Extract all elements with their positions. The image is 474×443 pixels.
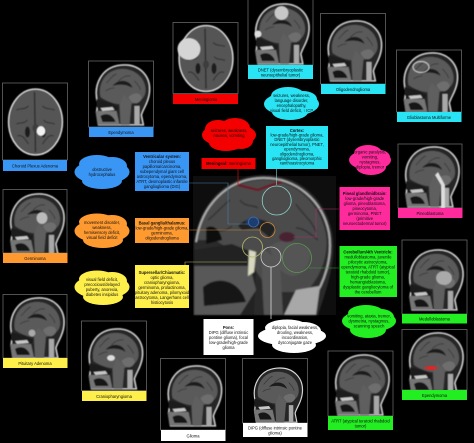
panel: DIPG xyxy=(242,358,308,437)
text box: cortex: low-grade/high-grade glioma, xyxy=(270,132,324,138)
callout: blue cloud symptoms: hydrocephalus xyxy=(89,172,115,177)
callout: white cloud symptoms: dysconjugate gaze xyxy=(278,340,313,345)
callout: green cloud symptoms: dysmetria, nystagmus, xyxy=(349,318,389,324)
text box: pineal gland/midbrain xyxy=(340,187,390,230)
callout: yellow cloud symptoms xyxy=(74,270,130,305)
callout: red cloud symptoms: nausea, vomiting xyxy=(214,133,245,138)
text box: suprasellar/chiasmatic xyxy=(135,265,190,308)
panel: pituitary adenoma xyxy=(3,294,68,368)
connector: cortex xyxy=(276,169,278,185)
callout: orange cloud symptoms: visual field deficit xyxy=(87,235,118,240)
panel: DNET: neuroepithelial tumor) xyxy=(261,72,301,78)
callout: red cloud symptoms xyxy=(202,118,256,151)
callout: cyan cloud symptoms: visual field deficit, ↑ ICP xyxy=(270,108,313,113)
text box: ventricular system: astrocytoma, ependymoma, xyxy=(137,174,187,179)
text box: suprasellar/chiasmatic: astrocytoma, Langerhans cell xyxy=(135,295,189,300)
callout: pink cloud symptoms xyxy=(349,145,391,175)
panel: glioblastoma multiforme xyxy=(396,50,462,122)
connector: basal ganglia xyxy=(189,229,260,231)
text box: cortex: ependymoma, xyxy=(284,147,310,152)
circle: pons xyxy=(261,247,281,267)
text box: ventricular system: ganglioglioma (DIG) xyxy=(144,184,181,189)
panel: medulloblastoma xyxy=(402,240,467,324)
panel: meningioma xyxy=(173,22,238,104)
text box: ventricular system: papilloma/carcinoma, xyxy=(143,164,181,169)
text box: cortex: xanthoastrocytoma xyxy=(280,161,315,166)
callout: orange cloud symptoms: hemisensory deficit, xyxy=(84,230,120,235)
panel: DIPG: DIPG (diffuse intrinsic pontine xyxy=(248,425,303,430)
callout: cyan cloud symptoms: encephalopathy, xyxy=(277,103,306,108)
callout: pink cloud symptoms: vomiting, xyxy=(362,154,378,160)
panel: pineoblastoma xyxy=(398,144,462,218)
connector: pineal xyxy=(293,209,339,237)
panel: glioma xyxy=(160,358,226,441)
panel: germinoma: Germinoma xyxy=(24,256,46,261)
panel: ATRT: tumor) xyxy=(355,424,367,428)
text box: suprasellar/chiasmatic: optic glioma, xyxy=(151,275,173,280)
text box: ventricular system: subependymal giant cell xyxy=(140,169,184,174)
text box: cortex xyxy=(266,126,328,169)
callout: cyan cloud symptoms: language disorder, xyxy=(275,98,308,103)
callout: green cloud symptoms: scanning speech xyxy=(354,324,385,328)
callout: cyan cloud symptoms: seizures, weakness, xyxy=(273,93,310,98)
panel: glioma: Glioma xyxy=(187,433,200,438)
text box: pons: pontine glioma), focal xyxy=(209,335,248,340)
callout: yellow cloud symptoms: puberty, anorexia, xyxy=(86,287,118,292)
text box: cerebellum/4th ventricle: pilocytic astrocytoma, xyxy=(348,260,388,264)
callout: cyan cloud symptoms xyxy=(264,87,319,120)
text box: pons: glioma xyxy=(222,345,235,350)
panel: ATRT xyxy=(328,351,393,430)
panel: craniopharyngioma xyxy=(82,321,146,401)
connector: ventricular xyxy=(189,183,249,224)
text box: ventricular system: ATRT, desmoplastic infantile xyxy=(136,179,188,184)
callout: green cloud symptoms xyxy=(342,305,396,338)
panel: ependymoma (green) xyxy=(402,330,467,400)
panel: ependymoma (green): Ependymoma xyxy=(422,393,448,398)
connector: cerebellum xyxy=(309,267,339,269)
text box: suprasellar/chiasmatic: pituitary adenoma, pilomyxoid xyxy=(135,290,190,295)
circle: cortex xyxy=(262,186,291,215)
callout: red cloud symptoms: seizures, weakness, xyxy=(211,128,247,133)
callout: blue cloud symptoms xyxy=(74,155,130,189)
callout: white cloud symptoms: diplopia, facial weakness, xyxy=(272,325,318,330)
callout: yellow cloud symptoms: diabetes insipidus xyxy=(86,292,118,297)
panel: ATRT: ATRT (atypical teratoid rhabdoid xyxy=(331,418,390,423)
text box: ventricular system: choroid plexus xyxy=(149,159,175,164)
panel: DNET: DNET (dysembryoplastic xyxy=(258,67,303,72)
panel: DIPG: glioma) xyxy=(268,430,282,436)
panel: craniopharyngioma: Craniopharyngioma xyxy=(96,394,133,399)
text box: cerebellum/4th ventricle: hemangioblastoma, xyxy=(350,280,386,284)
text box: pineal gland/midbrain: neuroectodermal tumor) xyxy=(343,221,387,226)
circle: ventricular system xyxy=(248,217,258,227)
text box: basal ganglia/thalamus: Basal ganglia/thalamus: xyxy=(139,220,185,226)
callout: white cloud symptoms: incoordination, xyxy=(282,335,308,340)
callout: green cloud symptoms: vomiting, ataxia, tremor, xyxy=(347,314,391,318)
text box: ventricular system: Ventricular system: xyxy=(143,154,181,159)
connector: pons xyxy=(270,267,272,319)
panel: meningioma: Meningioma xyxy=(195,97,218,102)
callout: blue cloud symptoms: obstructive xyxy=(92,167,113,172)
text box: basal ganglia/thalamus: low-grade/high-grade glioma, xyxy=(135,226,189,230)
text box: ventricular system xyxy=(135,152,189,191)
text box: pons: Pons: xyxy=(223,325,234,330)
text box: cortex: DNET (dysembryoplastic xyxy=(274,137,320,142)
text box: suprasellar/chiasmatic: histiocytosis xyxy=(151,300,173,305)
callout: pink cloud symptoms: organic paralysis, xyxy=(354,150,386,154)
text box: cerebellum/4th ventricle: medulloblastoma, juvenile xyxy=(344,254,392,260)
callout: white cloud symptoms: drooling, weakness, xyxy=(277,330,313,335)
text box: pineal gland/midbrain: glioma, pineoblastoma, xyxy=(344,201,386,206)
text box: cerebellum/4th ventricle: high-grade glioma, xyxy=(351,274,385,280)
text box: pineal gland/midbrain: (primitive xyxy=(356,216,374,221)
callout: yellow cloud symptoms: visual field deficit, xyxy=(86,277,118,282)
panel: ependymoma (blue): Ependymoma xyxy=(108,130,134,135)
text box: cerebellum/4th ventricle: the cerebellum xyxy=(355,290,382,294)
panel: ependymoma (blue) xyxy=(88,61,154,137)
text box: cortex: neuroepithelial tumor), PNET, xyxy=(270,142,324,147)
text box: pons: low-grade/high-grade xyxy=(209,340,249,345)
callout: orange cloud symptoms xyxy=(74,214,130,248)
panel: glioblastoma multiforme: Glioblastoma Multiforme xyxy=(407,115,452,120)
text box: basal ganglia/thalamus: oligodendroglioma xyxy=(145,236,179,240)
connector: meningeal xyxy=(237,169,239,185)
text box: cortex: Cortex: xyxy=(290,128,304,133)
panel: pineoblastoma: Pineoblastoma xyxy=(416,211,444,216)
text box: cerebellum/4th ventricle: teratoid rhabdoid tumor), xyxy=(346,270,390,274)
text box: pineal gland/midbrain: low-grade/high-grade xyxy=(345,196,385,201)
panel: DNET xyxy=(248,0,313,79)
panel: choroid plexus adenoma xyxy=(2,83,68,171)
text box: pineal gland/midbrain: Pineal gland/midbrain: xyxy=(343,191,387,196)
text box: cerebellum/4th ventricle: ependymoma, ATRT (atypical xyxy=(341,264,395,270)
text box: cerebellum/4th ventricle: dysplastic gangliocytoma of xyxy=(343,284,394,290)
text box: basal ganglia/thalamus xyxy=(135,218,189,243)
text box: meningeal: Meningeal: meningioma xyxy=(206,161,252,166)
panel: medulloblastoma: Medulloblastoma xyxy=(419,317,451,322)
text box: cortex: oligodendroglioma, xyxy=(280,151,314,156)
callout: white cloud symptoms xyxy=(258,320,326,353)
text box: cerebellum/4th ventricle xyxy=(340,246,397,297)
central brain MRI xyxy=(193,175,336,315)
text box: suprasellar/chiasmatic: germinoma, prolactinoma, xyxy=(138,285,186,290)
panel: germinoma xyxy=(3,190,68,263)
callout: yellow cloud symptoms: precocious/delayed xyxy=(84,282,120,287)
text box: pons: DIPG (diffuse intrinsic xyxy=(209,330,248,335)
connector: suprasellar xyxy=(185,262,247,265)
text box: suprasellar/chiasmatic: Supersellar/Chiasmatic: xyxy=(139,270,185,275)
callout: orange cloud symptoms: movement disorder, xyxy=(84,220,120,225)
circle: cerebellum xyxy=(282,244,312,272)
callout: pink cloud symptoms: nystagmus, xyxy=(360,160,380,164)
panel: pituitary adenoma: Pituitary Adenoma xyxy=(18,361,52,366)
text box: cerebellum/4th ventricle: Cerebellum/4th Ventricle: xyxy=(343,250,393,254)
circle: suprasellar xyxy=(242,237,262,257)
text box: pineal gland/midbrain: pineocytoma, xyxy=(353,206,377,211)
text box: suprasellar/chiasmatic: craniopharyngioma, xyxy=(144,280,180,285)
text box: cortex: ganglioglioma, pleomorphic xyxy=(272,156,322,161)
callout: orange cloud symptoms: weakness, xyxy=(92,225,112,230)
panel: oligodendroglioma: Oligodendroglioma xyxy=(336,87,371,92)
text box: basal ganglia/thalamus: germinoma, xyxy=(151,230,173,236)
panel: choroid plexus adenoma: Choroid Plexus Adenoma xyxy=(12,163,59,168)
panel: oligodendroglioma xyxy=(320,14,386,94)
text box: meningeal xyxy=(202,158,256,169)
text box: pineal gland/midbrain: germinoma, PNET xyxy=(348,211,382,216)
text box: pons xyxy=(204,319,254,355)
circle: basal ganglia xyxy=(260,222,275,238)
callout: pink cloud symptoms: diplopia, tremor xyxy=(356,164,385,170)
